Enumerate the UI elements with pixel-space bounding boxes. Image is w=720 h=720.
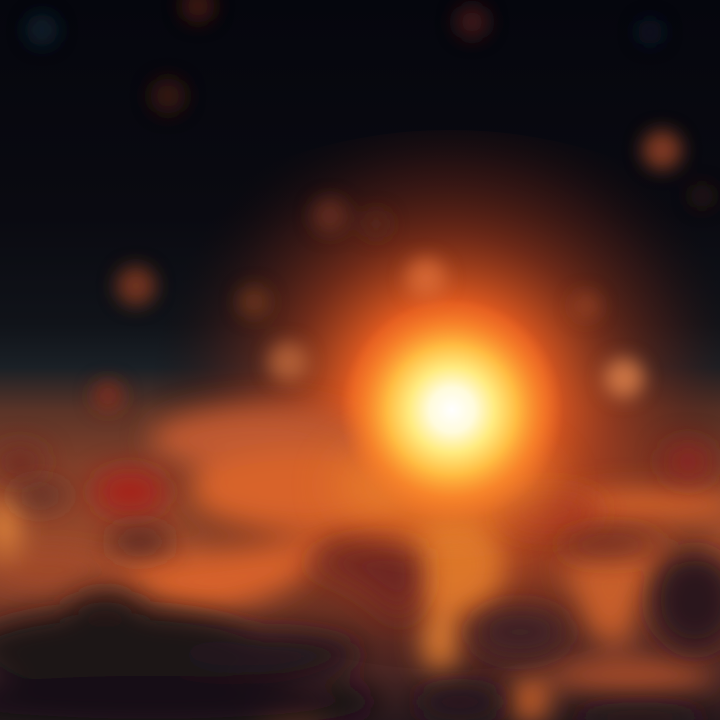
cloud bank: dark shadows — [0, 488, 720, 720]
cloud bank: red patches — [0, 444, 712, 530]
floating embers — [26, 0, 714, 412]
sun halo — [80, 130, 720, 670]
orange glow below sun — [335, 440, 555, 530]
sun core — [340, 298, 564, 522]
cloud bank: bright wisps — [0, 406, 720, 720]
